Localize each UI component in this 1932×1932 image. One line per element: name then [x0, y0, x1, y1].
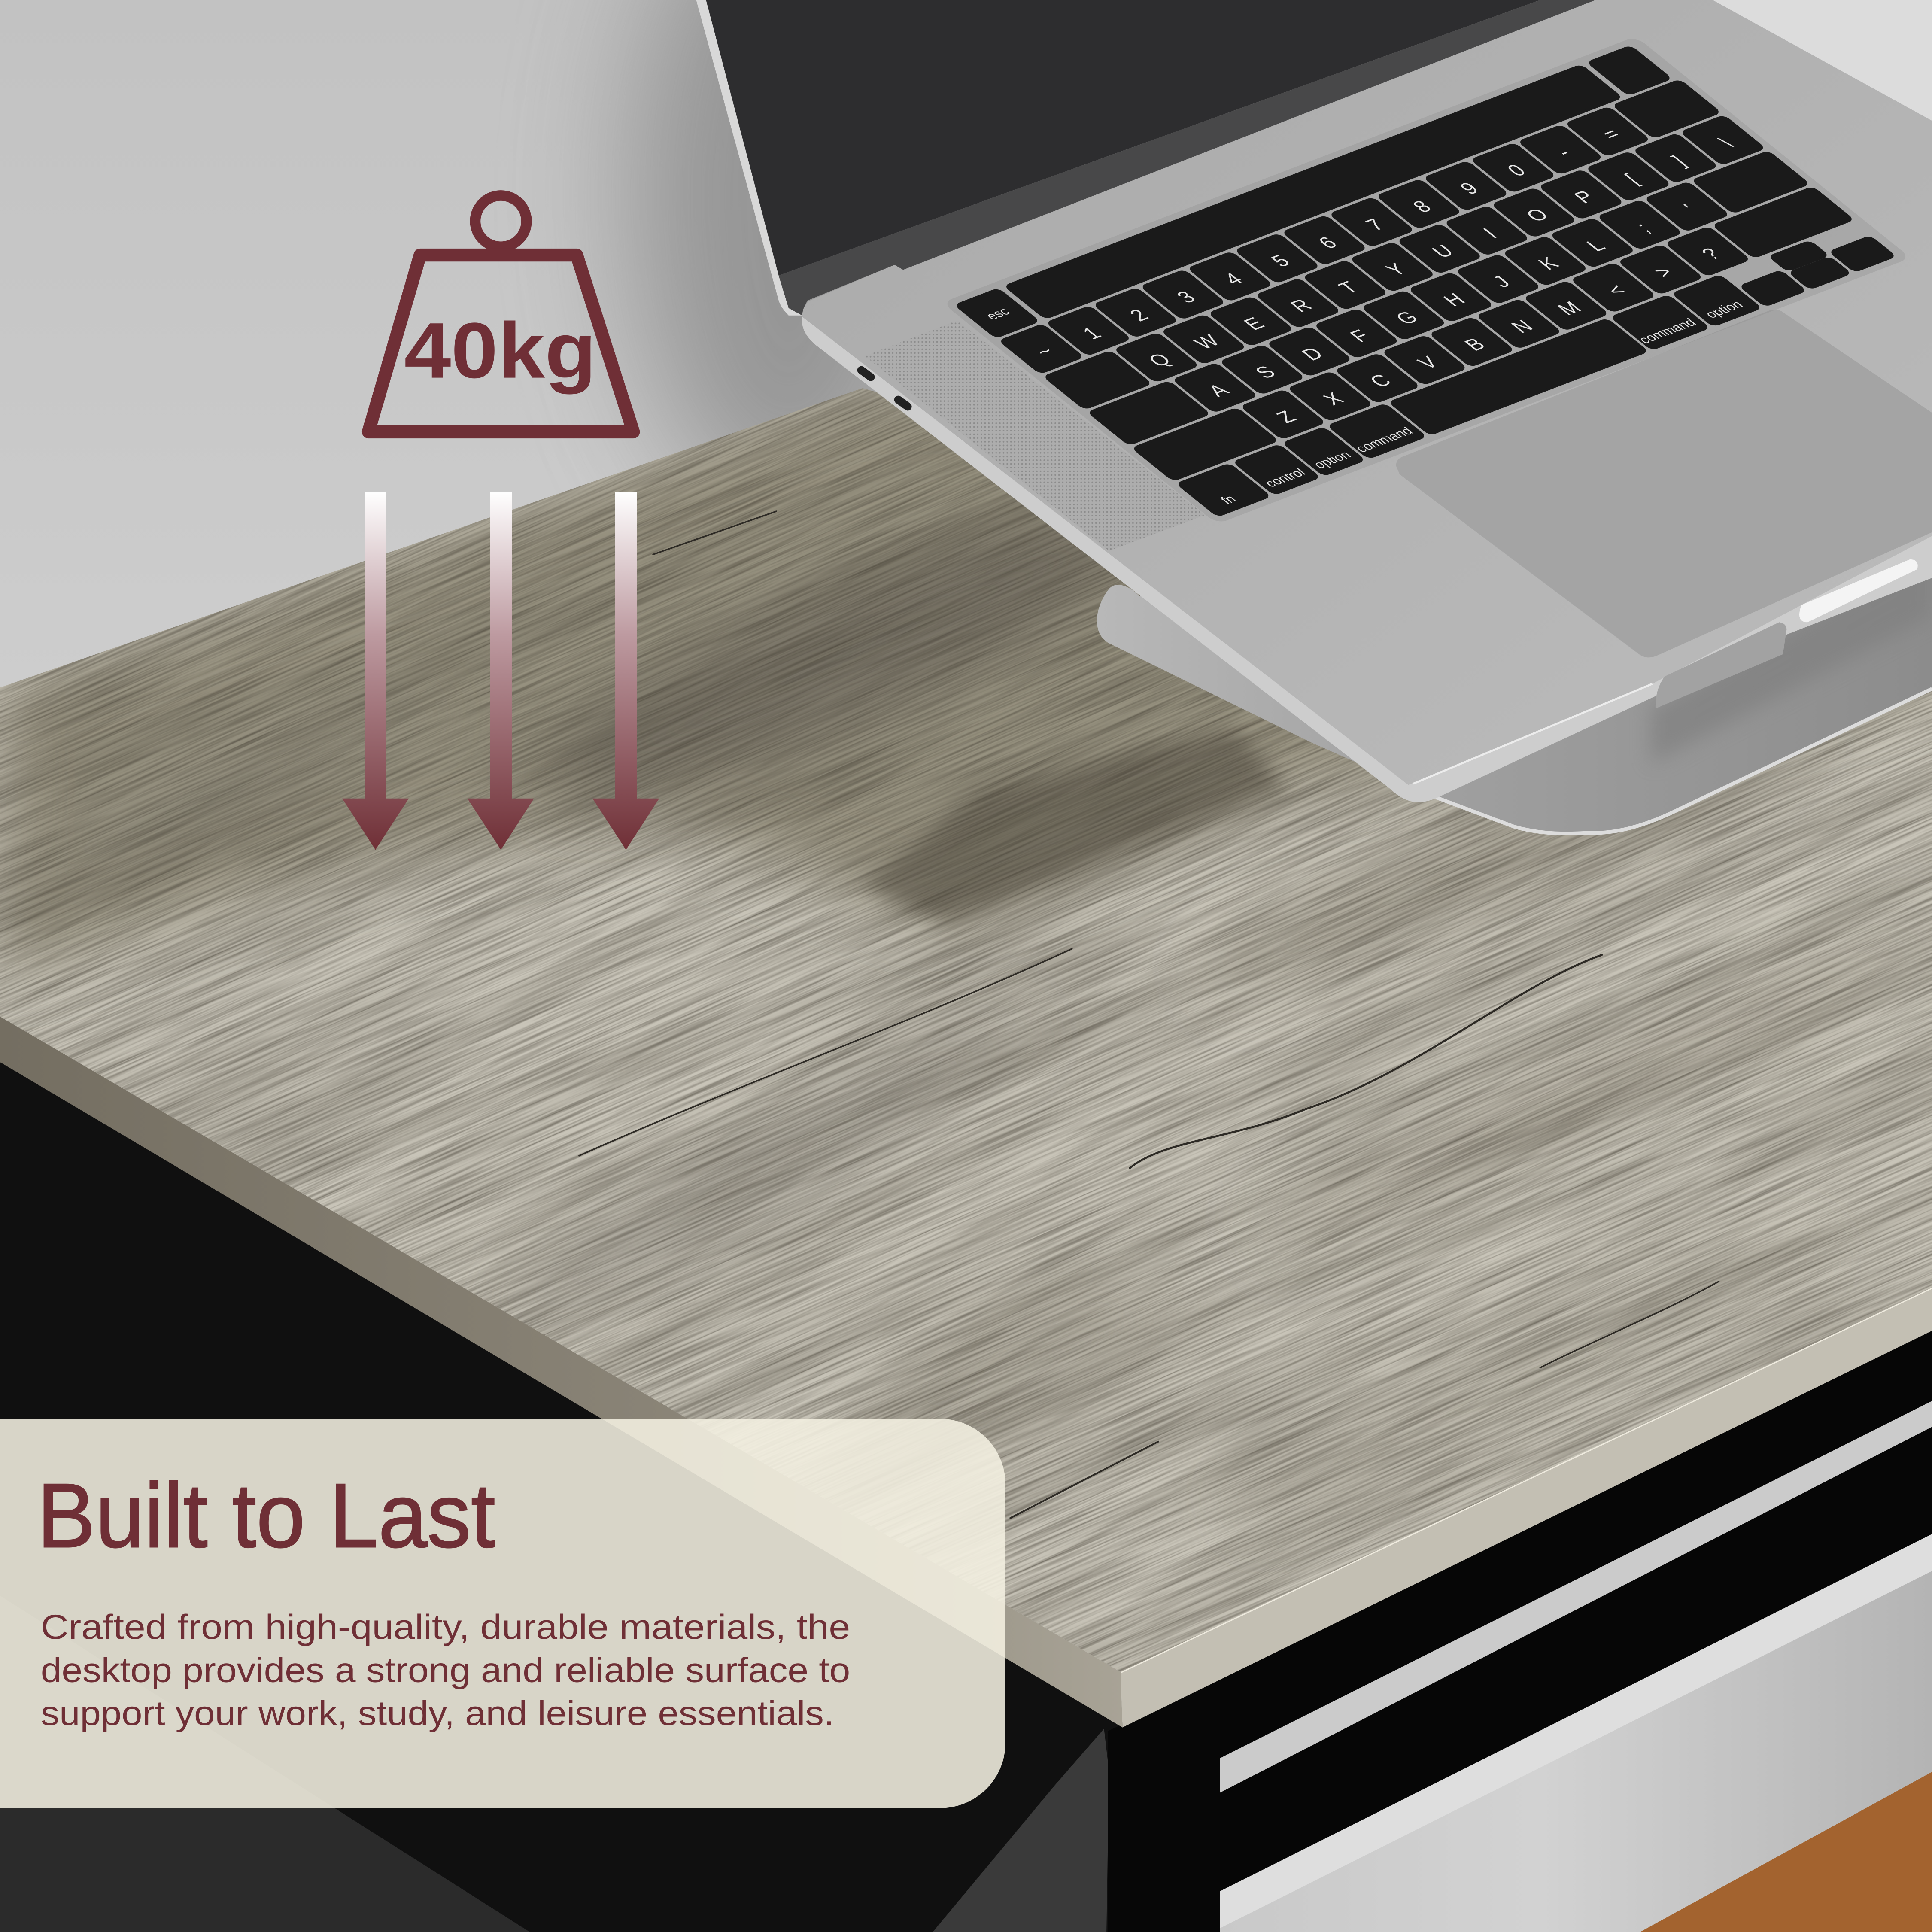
key caps: [956, 44, 1897, 516]
key legends: X: [1318, 389, 1349, 409]
desk front edge faces: [0, 1017, 1932, 1728]
key legends: A: [1203, 380, 1234, 400]
dark upper wood area: [0, 370, 1932, 973]
key legends: [: [1620, 170, 1643, 188]
wood cracks: [579, 511, 1719, 1518]
key legends: 7: [1361, 216, 1389, 234]
body text: Crafted from high-quality, durable materials, the: [41, 1608, 850, 1646]
panel: built to last: [0, 1419, 1005, 1808]
stand clip: [1656, 622, 1786, 708]
key legends: L: [1582, 236, 1610, 255]
white reflective strip: [1799, 559, 1918, 622]
key legends: W: [1189, 331, 1225, 353]
key legends: ?: [1697, 245, 1725, 264]
load arrows: [342, 492, 659, 850]
key legends: 4: [1219, 270, 1248, 289]
laptop screen: [696, 0, 1596, 316]
usb ports: [856, 365, 913, 412]
grain texture: [0, 370, 1932, 1725]
body text: desktop provides a strong and reliable surface to: [41, 1651, 850, 1689]
floor: [1640, 1772, 1932, 1932]
key legends: H: [1439, 290, 1470, 310]
keyboard plate: [942, 36, 1911, 524]
key legends: =: [1596, 125, 1625, 144]
deck side band: [802, 317, 1932, 802]
key legends: >: [1649, 263, 1679, 282]
key legends: F: [1345, 326, 1375, 346]
weight body: [368, 255, 633, 432]
key legends: command: [1352, 425, 1416, 455]
key legends: G: [1391, 308, 1424, 328]
key legends: fn: [1217, 493, 1239, 507]
panel background: [0, 1419, 1005, 1808]
key legends: N: [1507, 316, 1538, 337]
body text: support your work, study, and leisure essentials.: [41, 1694, 834, 1733]
laptop: [696, 0, 1932, 802]
key legends: ~: [1030, 342, 1059, 361]
key legends: 1: [1078, 324, 1106, 343]
black desk leg: [1108, 1678, 1220, 1932]
key legends: I: [1478, 225, 1502, 242]
key legends: J: [1488, 273, 1516, 291]
key legends: B: [1460, 335, 1491, 355]
key legends: ;: [1631, 219, 1655, 236]
key legends: <: [1602, 281, 1631, 300]
key legends: O: [1521, 205, 1554, 225]
key legends: 3: [1172, 288, 1201, 307]
key legends: C: [1365, 371, 1397, 391]
key legends: T: [1334, 278, 1364, 298]
body text: [41, 1608, 850, 1733]
key legends: S: [1250, 362, 1281, 382]
arrow 2: [468, 492, 534, 850]
key legends: Z: [1272, 407, 1301, 427]
keyboard: [942, 36, 1911, 524]
wood knots: [283, 917, 1109, 1417]
key legends: esc: [982, 305, 1013, 322]
laptop deck: [802, 0, 1932, 802]
key legends: Q: [1144, 350, 1176, 371]
key legends: ]: [1667, 152, 1691, 170]
weight icon: 40kg: [368, 195, 633, 432]
key legends: [982, 63, 1874, 508]
weight ring: [475, 195, 526, 247]
wall background: [0, 0, 1932, 986]
key legends: 8: [1408, 197, 1437, 216]
key legends: P: [1569, 187, 1600, 207]
key legends: control: [1261, 466, 1309, 489]
deck front edge highlight: [1413, 684, 1653, 784]
key legends: K: [1534, 254, 1564, 273]
key legends: D: [1297, 344, 1329, 364]
stand base: [1097, 493, 1932, 833]
key legends: 0: [1502, 161, 1531, 180]
wood desktop: [0, 388, 1932, 1672]
heading: Built to Last: [37, 1465, 495, 1567]
key legends: -: [1552, 144, 1576, 161]
key legends: 5: [1267, 252, 1295, 270]
key legends: command: [1635, 316, 1699, 346]
trackpad: [1396, 310, 1932, 657]
key legends: U: [1427, 241, 1459, 261]
key legends: option: [1701, 298, 1746, 321]
key legends: E: [1239, 314, 1270, 334]
key legends: 2: [1125, 306, 1154, 325]
key legends: 6: [1313, 234, 1342, 252]
key legends: V: [1413, 353, 1443, 373]
blurred drawer behind frame: [1220, 1534, 1932, 1932]
speaker grille: [865, 320, 1205, 551]
key legends: 9: [1455, 179, 1484, 198]
arrow 1: [342, 492, 409, 850]
weight label: 40kg: [404, 307, 596, 395]
key legends: \: [1714, 134, 1738, 151]
fabric drawer below desk: [0, 1047, 1133, 1932]
key legends: option: [1310, 449, 1355, 471]
key legends: R: [1285, 296, 1317, 316]
key legends: ': [1679, 201, 1701, 218]
key legends: Y: [1380, 260, 1411, 279]
arrow 3: [592, 492, 659, 850]
key legends: M: [1552, 298, 1586, 319]
black frame rails: [1109, 1318, 1932, 1891]
